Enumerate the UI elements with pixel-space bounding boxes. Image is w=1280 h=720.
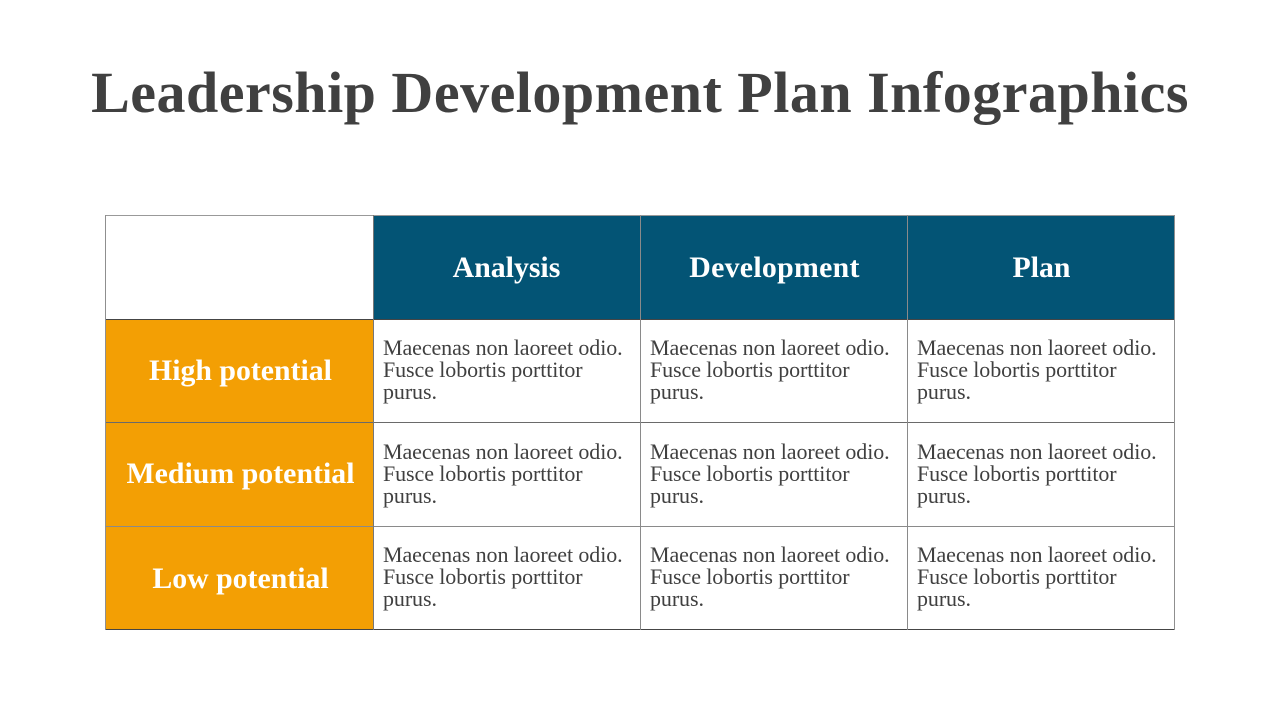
cell: medium, development (650, 439, 890, 508)
cell: low, plan (917, 542, 1157, 611)
row label: Medium potential (106, 423, 373, 526)
cell: high, development (650, 335, 890, 404)
cell: high, development: Maecenas non laoreet odio. (650, 335, 890, 360)
header: Plan: Plan (1013, 251, 1070, 284)
cell: high, analysis: Fusce lobortis porttitor (383, 357, 582, 382)
cell: medium, plan: purus. (917, 483, 971, 508)
cell: low, development (650, 542, 890, 611)
row label: Low potential: Low potential (152, 562, 329, 594)
cell: medium, analysis: Maecenas non laoreet odio. (383, 439, 623, 464)
cell: high, plan (917, 335, 1157, 404)
title: Leadership Development Plan Infographics (91, 60, 1189, 125)
cell: high, plan: Maecenas non laoreet odio. (917, 335, 1157, 360)
cell: high, analysis: Maecenas non laoreet odio. (383, 335, 623, 360)
cell: low, plan: Fusce lobortis porttitor (917, 564, 1116, 589)
cell: high, plan: purus. (917, 379, 971, 404)
cell: medium, plan: Maecenas non laoreet odio. (917, 439, 1157, 464)
cell: medium, analysis: Fusce lobortis porttitor (383, 461, 582, 486)
row label: High potential: High potential (149, 354, 332, 387)
header: Development: Development (689, 251, 860, 284)
header: Analysis (373, 216, 640, 320)
cell: low, analysis (383, 542, 623, 611)
cell: low, development: Maecenas non laoreet odio. (650, 542, 890, 567)
row label: High potential (106, 320, 373, 423)
cell: high, plan: Fusce lobortis porttitor (917, 357, 1116, 382)
cell: low, analysis: Fusce lobortis porttitor (383, 564, 582, 589)
cell: medium, plan (917, 439, 1157, 508)
cell: medium, development: purus. (650, 483, 704, 508)
cell: high, analysis (383, 335, 623, 404)
cell: medium, development: Fusce lobortis porttitor (650, 461, 850, 486)
cell: medium, plan: Fusce lobortis porttitor (917, 461, 1116, 486)
row label: Medium potential: Medium potential (126, 457, 355, 490)
header: Plan (907, 216, 1174, 320)
cell: high, analysis: purus. (383, 379, 437, 404)
cell: medium, analysis (383, 439, 623, 508)
cell: medium, development: Maecenas non laoreet odio. (650, 439, 890, 464)
table (105, 215, 1175, 630)
row label: Low potential (106, 526, 373, 630)
cell: medium, analysis: purus. (383, 483, 437, 508)
cell: high, development: purus. (650, 379, 704, 404)
cell: low, analysis: Maecenas non laoreet odio. (383, 542, 623, 567)
cell: low, plan: purus. (917, 586, 971, 611)
cell: high, development: Fusce lobortis porttitor (650, 357, 850, 382)
cell: low, plan: Maecenas non laoreet odio. (917, 542, 1157, 567)
cell: low, development: purus. (650, 586, 704, 611)
header: Development (640, 216, 907, 320)
cell: low, development: Fusce lobortis porttitor (650, 564, 850, 589)
cell: low, analysis: purus. (383, 586, 437, 611)
header: Analysis: Analysis (453, 251, 560, 284)
